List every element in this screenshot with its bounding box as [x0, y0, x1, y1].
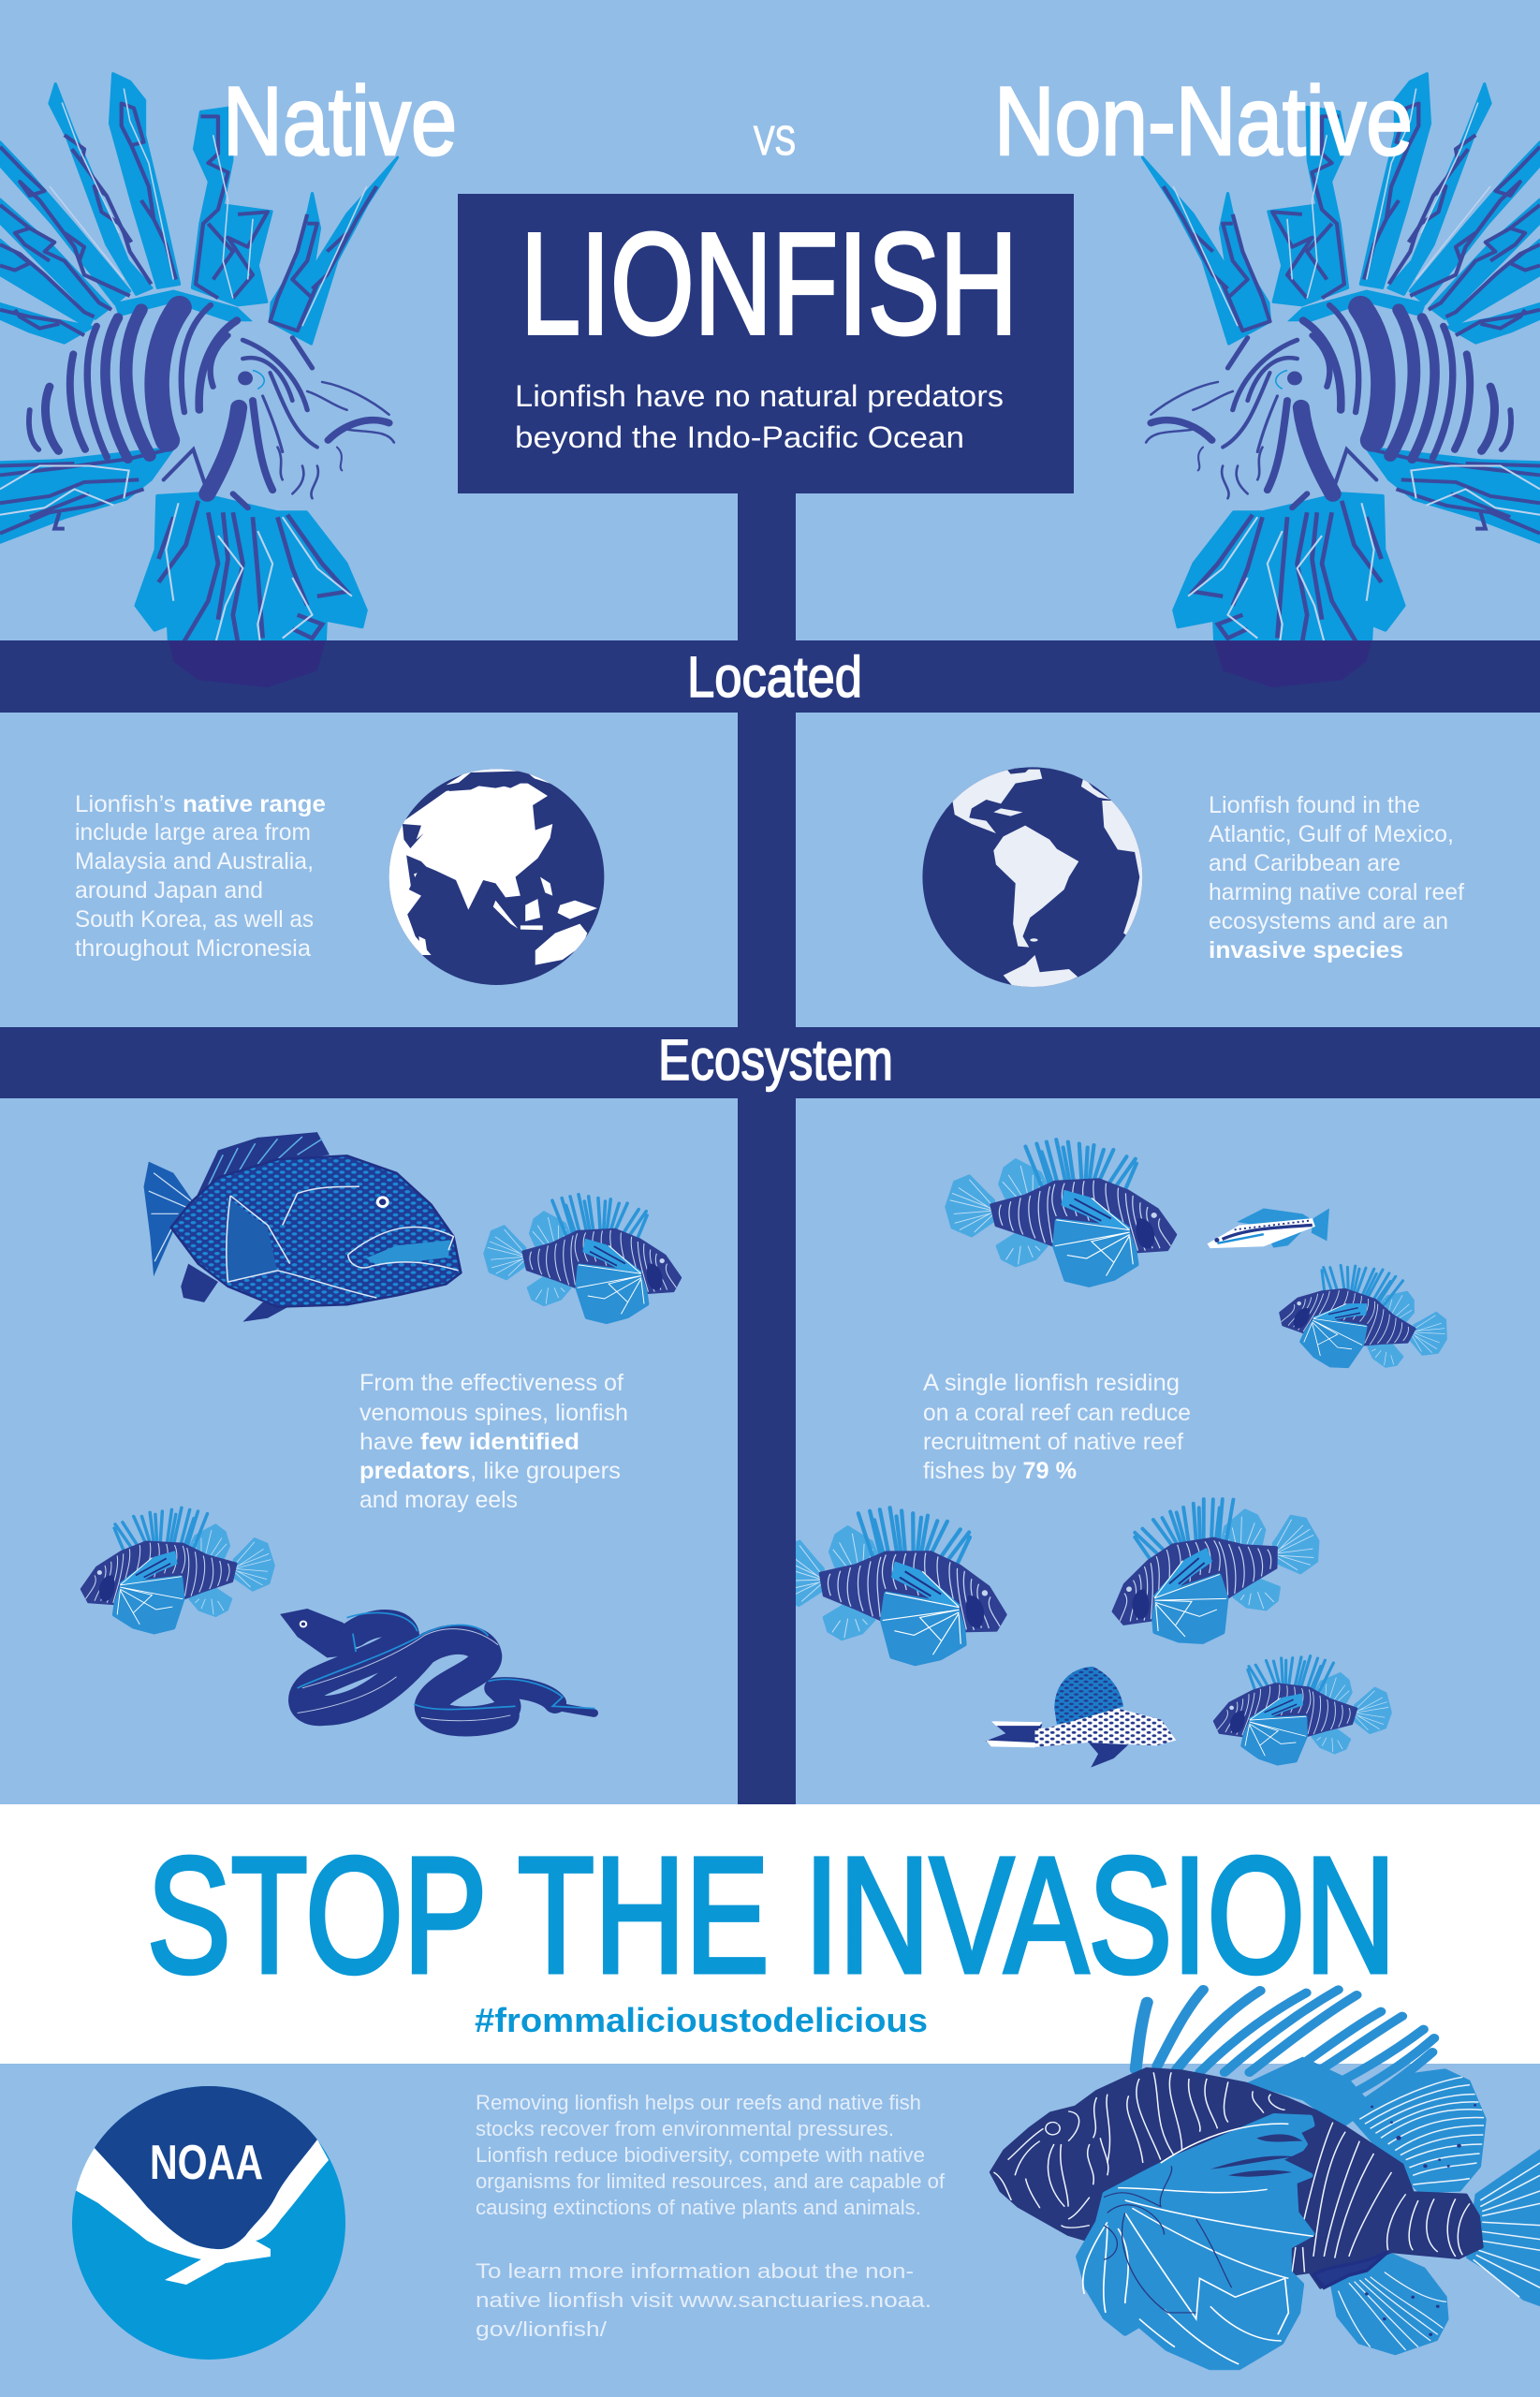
- text: 79 percent statistic: fishes by 79 %: [923, 1458, 1077, 1484]
- illustration: large lionfish: [990, 1990, 1540, 2367]
- text: removing lionfish: native lionfish visit www.sanctuaries.noaa.: [476, 2288, 931, 2312]
- text: invasive range: [1209, 792, 1464, 963]
- heading: Located: Located: [687, 645, 862, 709]
- text: few identified predators: [359, 1370, 628, 1513]
- text: few identified predators: From the effectiveness of: [359, 1370, 623, 1396]
- text: removing lionfish: organisms for limited resources, and are capable of: [476, 2169, 946, 2193]
- illustration: lionfish group in invaded reef: [770, 1140, 1459, 1772]
- illustration: moray eel: [280, 1609, 594, 1722]
- heading: Ecosystem: Ecosystem: [658, 1028, 893, 1092]
- wordmark: NOAA: [150, 2136, 263, 2190]
- text: removing lionfish: gov/lionfish/: [476, 2317, 608, 2341]
- illustration: lionfish facing left: [81, 1507, 273, 1632]
- text: invasive range: harming native coral reef: [1209, 879, 1464, 905]
- section band: Ecosystem: [0, 1027, 1540, 1098]
- text: invasive range: and Caribbean are: [1209, 850, 1401, 876]
- title: LIONFISH: LIONFISH: [521, 203, 1018, 364]
- text: invasive range: ecosystems and are an: [1209, 908, 1448, 934]
- text: native range: around Japan and: [75, 877, 263, 904]
- hashtag: #frommalicioustodelicious: [475, 2001, 928, 2039]
- text: invasive range: invasive species: [1209, 937, 1403, 963]
- text: few identified predators: have few identified: [359, 1429, 579, 1455]
- text: few identified predators: predators, like groupers: [359, 1458, 621, 1484]
- vertical divider bar: [738, 493, 796, 1804]
- subtitle: Lionfish have no natural predators: [515, 379, 1004, 413]
- subtitle: beyond the Indo-Pacific Ocean: [515, 420, 964, 454]
- text: 79 percent statistic: A single lionfish residing: [923, 1370, 1180, 1396]
- subtitle: [515, 379, 1004, 454]
- text: removing lionfish: causing extinctions of native plants and animals.: [476, 2196, 921, 2219]
- icon: globe showing Atlantic: [922, 767, 1142, 987]
- illustration: top lionfish: [946, 1140, 1176, 1285]
- text: invasive range: Lionfish found in the: [1209, 792, 1420, 818]
- icon: globe showing Indo-Pacific: [382, 766, 604, 985]
- text: 79 percent statistic: on a coral reef can reduce: [923, 1400, 1191, 1426]
- text: removing lionfish: Removing lionfish helps our reefs and native fish: [476, 2091, 921, 2114]
- heading: Native: Native: [223, 67, 457, 176]
- section band: Located: [0, 640, 1540, 713]
- text: removing lionfish: To learn more information about the non-: [476, 2259, 914, 2283]
- text: native range: include large area from: [75, 819, 311, 846]
- illustration: right lionfish: [1269, 1245, 1459, 1394]
- text: removing lionfish: [476, 2091, 946, 2341]
- illustration: small native wrasse: [1208, 1209, 1329, 1248]
- panel: call to action band: [0, 1804, 1540, 2064]
- illustration: pleco: [985, 1667, 1176, 1768]
- wave and gull: [56, 2140, 329, 2285]
- illustration: lionfish facing right near grouper: [485, 1195, 681, 1322]
- text: native range: Malaysia and Australia,: [75, 848, 314, 875]
- heading: vs: VS: [754, 118, 796, 164]
- text: native range: South Korea, as well as: [75, 906, 314, 933]
- text: native range: [75, 791, 326, 962]
- text: native range: throughout Micronesia: [75, 935, 311, 962]
- text: removing lionfish: stocks recover from environmental pressures.: [476, 2117, 894, 2140]
- text: invasive range: Atlantic, Gulf of Mexico,: [1209, 821, 1454, 847]
- illustration: grouper: [144, 1132, 461, 1322]
- title panel: [458, 194, 1074, 493]
- heading: Non-Native: Non-Native: [994, 67, 1413, 176]
- illustration: lower-right lionfish: [1211, 1650, 1394, 1772]
- illustration: center lionfish: [1094, 1478, 1334, 1659]
- text: few identified predators: venomous spines, lionfish: [359, 1400, 628, 1426]
- logo: NOAA: [72, 2086, 345, 2360]
- text: native range: Lionfish’s native range: [75, 791, 326, 817]
- text: 79 percent statistic: recruitment of native reef: [923, 1429, 1183, 1455]
- text: few identified predators: and moray eels: [359, 1487, 518, 1513]
- text: 79 percent statistic: [923, 1370, 1191, 1484]
- text: removing lionfish: Lionfish reduce biodiversity, compete with native: [476, 2143, 925, 2167]
- illustration: non-native lionfish head: [1142, 74, 1540, 687]
- illustration: native lionfish head: [0, 74, 398, 687]
